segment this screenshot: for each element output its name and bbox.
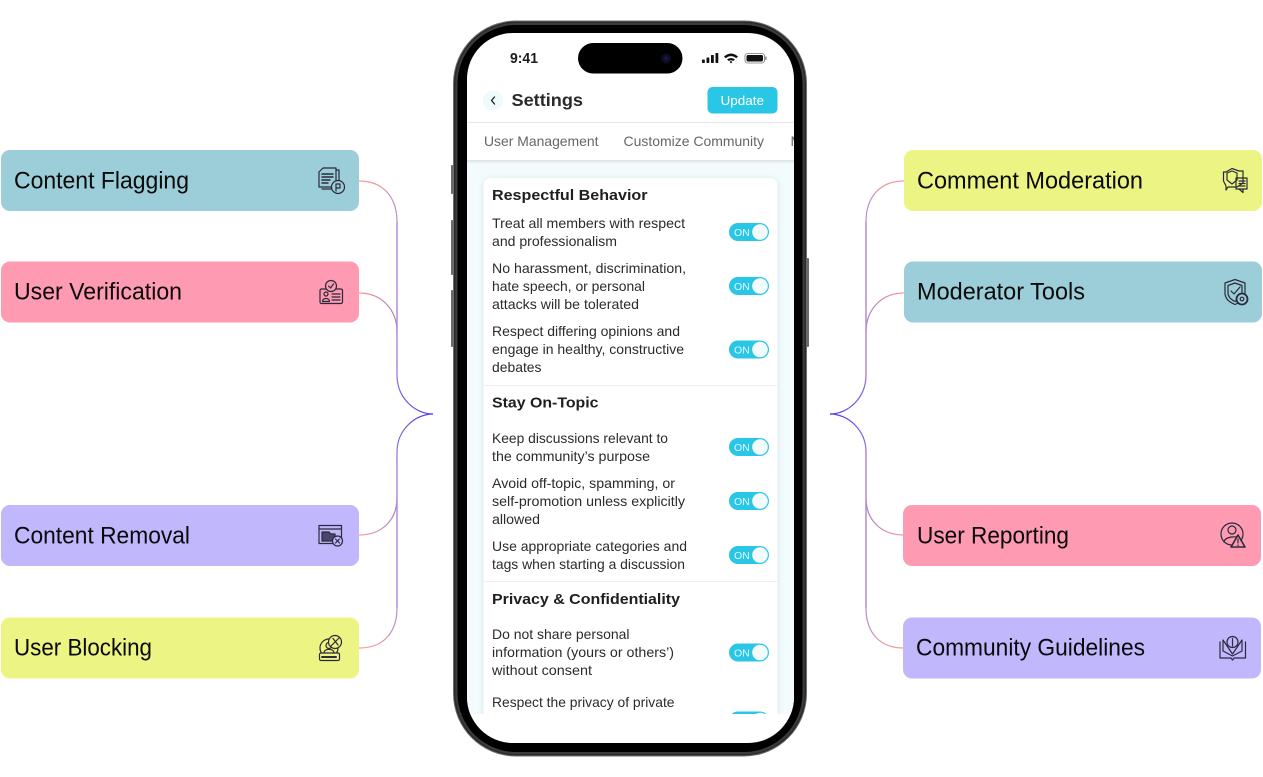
card: User Blocking: User Blocking xyxy=(14,634,152,662)
section: Privacy and Confidentiality: without consent xyxy=(491,662,592,678)
icon: blocked user xyxy=(320,636,342,660)
tabs: User Management xyxy=(484,133,599,149)
phone screen xyxy=(467,33,802,743)
section: Respectful Behavior: Respectful Behavior xyxy=(492,187,648,204)
card: Comment Moderation: Comment Moderation xyxy=(917,168,1143,194)
toggle switches: ON xyxy=(734,227,750,239)
card: User Verification xyxy=(1,262,359,322)
section: Privacy and Confidentiality: information (yours or others’) xyxy=(492,644,674,660)
content background xyxy=(467,160,794,738)
toggle switches: ON xyxy=(734,496,750,508)
section: Privacy and Confidentiality xyxy=(491,591,681,710)
section: Stay On-Topic: tags when starting a discussion xyxy=(492,556,685,572)
section: Respectful Behavior: attacks will be tolerated xyxy=(492,296,639,312)
icon: shield with gear xyxy=(1225,280,1248,304)
card: User Reporting xyxy=(903,505,1261,566)
card: User Verification: User Verification xyxy=(14,278,182,306)
section: Stay On-Topic xyxy=(492,394,687,572)
section: Privacy and Confidentiality: Privacy & Confidentiality xyxy=(492,591,681,608)
section: Stay On-Topic: Avoid off-topic, spamming, or xyxy=(492,475,675,491)
toggle switches: ON xyxy=(734,550,750,562)
toggle switches: ON xyxy=(734,648,750,660)
phone xyxy=(451,20,809,756)
section: Respectful Behavior: hate speech, or personal xyxy=(492,278,645,294)
tabs xyxy=(485,136,794,149)
icon: flagged document xyxy=(319,168,344,194)
connector: right bracket xyxy=(830,181,904,648)
card: Community Guidelines xyxy=(903,618,1261,678)
section: Stay On-Topic: Keep discussions relevant to xyxy=(492,430,668,446)
section: Privacy and Confidentiality: Respect the privacy of private xyxy=(492,694,675,710)
section: Stay On-Topic: self-promotion unless explicitly xyxy=(492,493,685,509)
section: Privacy and Confidentiality: Do not share personal xyxy=(492,626,630,642)
section: Respectful Behavior xyxy=(492,187,686,375)
update button: Update xyxy=(720,93,764,108)
icon: verified ID card xyxy=(320,280,342,304)
phone side buttons xyxy=(451,165,809,347)
icon: guideline book xyxy=(1220,636,1246,660)
tabs: M xyxy=(790,133,802,149)
section: Respectful Behavior: debates xyxy=(492,359,542,375)
section: Stay On-Topic: Stay On-Topic xyxy=(492,394,598,412)
tabs: Customize Community xyxy=(624,133,764,149)
update button xyxy=(708,87,778,114)
icon: shield with comments xyxy=(1224,168,1247,192)
card: Community Guidelines: Community Guidelines xyxy=(916,634,1145,662)
back button xyxy=(483,90,503,110)
toggle switches: ON xyxy=(734,442,750,454)
card: Content Flagging xyxy=(1,150,359,211)
card: Moderator Tools xyxy=(904,262,1262,322)
card: Content Flagging: Content Flagging xyxy=(14,168,189,194)
section: Respectful Behavior: No harassment, discrimination, xyxy=(492,260,686,276)
card: Content Removal xyxy=(1,505,359,566)
status bar time: 9:41 xyxy=(510,51,538,67)
section: Respectful Behavior: Respect differing opinions and xyxy=(492,323,680,339)
status icons xyxy=(702,53,766,64)
section: Stay On-Topic: the community’s purpose xyxy=(492,448,650,464)
icon: user with warning xyxy=(1221,523,1245,547)
dynamic island xyxy=(578,43,682,74)
card: User Reporting: User Reporting xyxy=(917,522,1069,550)
section: Respectful Behavior: engage in healthy, constructive xyxy=(492,341,684,357)
card: Moderator Tools: Moderator Tools xyxy=(917,278,1085,306)
icon: window with remove mark xyxy=(319,526,342,546)
toggle switches: ON xyxy=(734,281,750,293)
connector: left bracket xyxy=(359,181,433,648)
phone frame xyxy=(453,20,807,756)
section: Respectful Behavior: Treat all members with respect xyxy=(492,215,685,231)
section: Stay On-Topic: Use appropriate categories and xyxy=(492,538,687,554)
card: Content Removal: Content Removal xyxy=(14,522,190,550)
card: Comment Moderation xyxy=(904,150,1262,211)
toggle switches: ON xyxy=(734,344,750,356)
toggle switches xyxy=(729,223,769,730)
card: User Blocking xyxy=(1,618,359,678)
section: Respectful Behavior: and professionalism xyxy=(492,233,617,249)
screen title: Settings xyxy=(512,90,583,110)
settings card xyxy=(484,178,778,738)
section: Stay On-Topic: allowed xyxy=(492,511,540,527)
